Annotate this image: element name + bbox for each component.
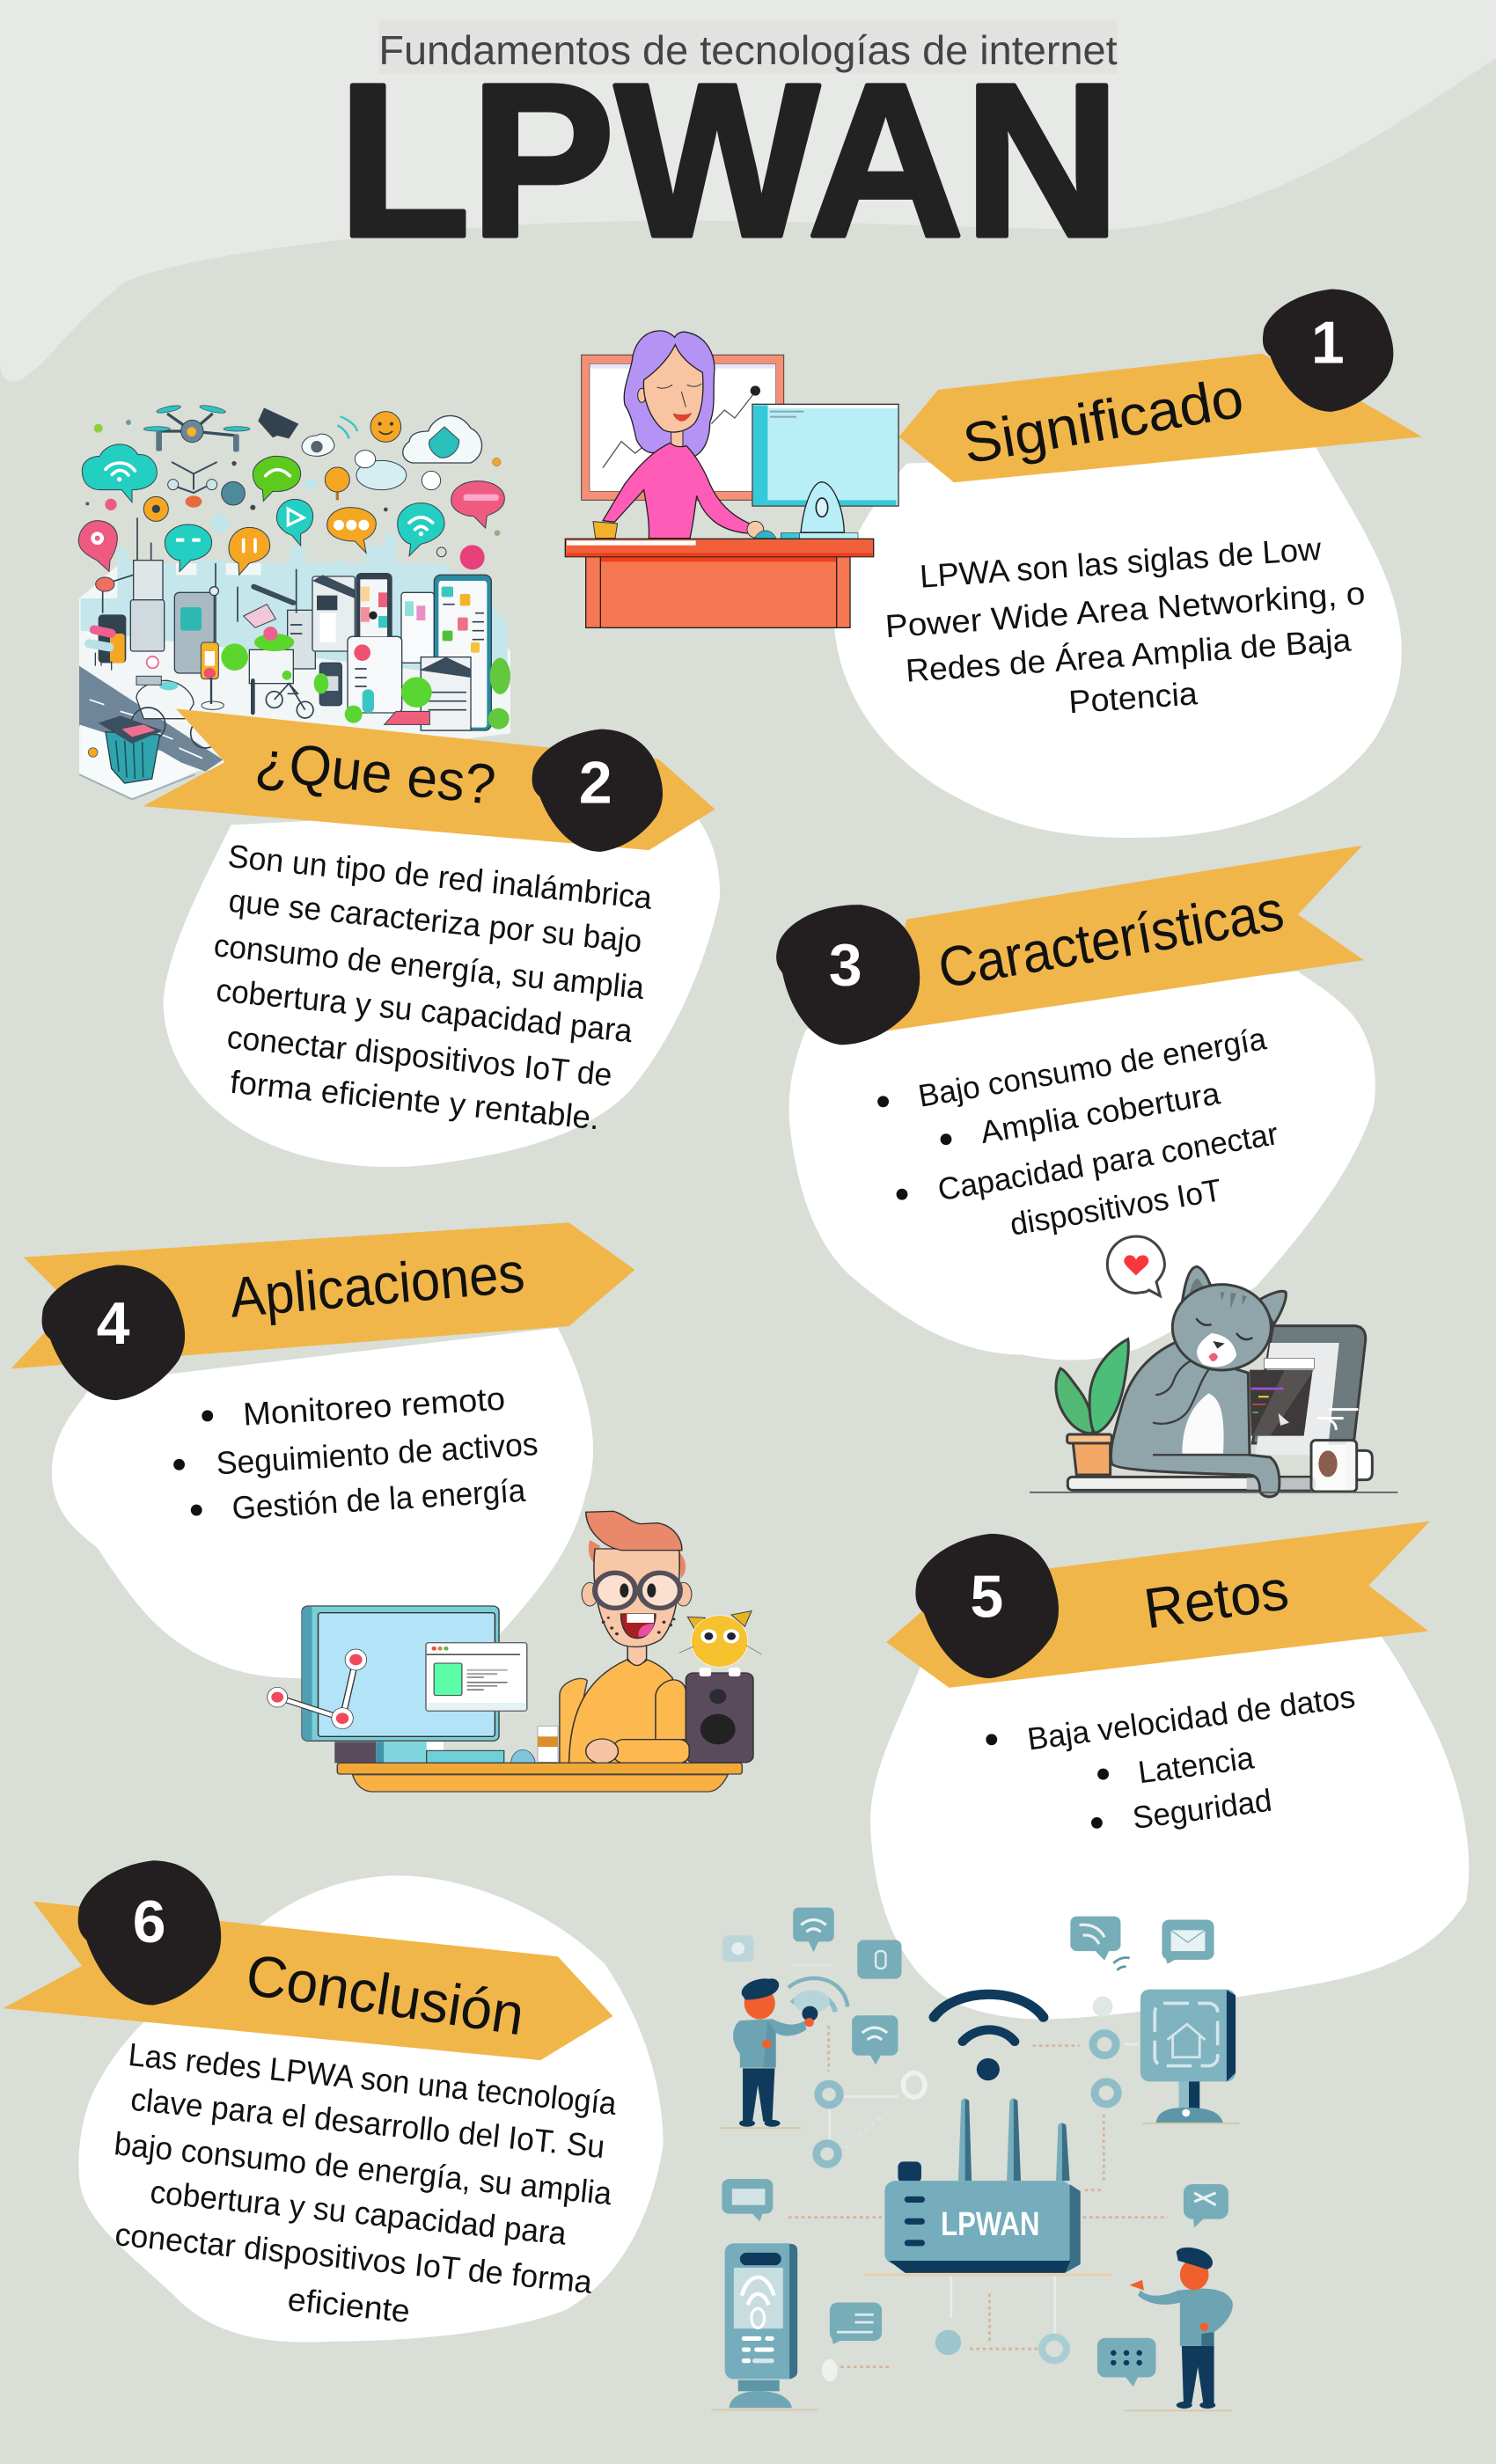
description text (113, 2036, 619, 2329)
number badge 1 (1263, 290, 1393, 412)
desk (353, 1775, 728, 1792)
heading: Significado: Significado (958, 365, 1248, 476)
text bubble 3 (789, 972, 1375, 1360)
heart bubble (1107, 1236, 1164, 1296)
description text: Redes de Área Amplia de Baja (905, 621, 1353, 689)
panel: que es (143, 708, 720, 1167)
number badge 2: 2 (579, 750, 612, 816)
cup (538, 1727, 558, 1762)
person right (1125, 2248, 1233, 2411)
heading: Aplicaciones: Aplicaciones (227, 1241, 527, 1330)
text bubble 6 (78, 1875, 664, 2343)
description text: clave para el desarrollo del IoT. Su (129, 2081, 606, 2165)
wifi signal (934, 1994, 1044, 2042)
illustration: woman at desk (565, 331, 898, 627)
network nodes (277, 1660, 356, 1719)
bullet list: Amplia cobertura (978, 1075, 1222, 1150)
number badge 6: 6 (133, 1889, 166, 1955)
bullet list: Seguimiento de activos (216, 1426, 539, 1481)
description text: Son un tipo de red inalámbrica (226, 838, 654, 916)
ribbon 6 (4, 1902, 612, 2060)
kiosk device (711, 2243, 818, 2410)
illustration: LPWAN router network (711, 1908, 1239, 2411)
person left (720, 1965, 847, 2129)
number badge 5: 5 (971, 1565, 1003, 1631)
small cat (687, 1617, 705, 1632)
text bubble 4 (52, 1328, 593, 1678)
text bubble 1 (834, 446, 1402, 838)
laptop base (1067, 1477, 1314, 1490)
illustration: cat with laptop (1030, 1236, 1397, 1497)
bullet list: Monitoreo remoto (242, 1381, 506, 1433)
text bubble 2 (164, 802, 720, 1167)
person (560, 1678, 587, 1763)
bullet list (173, 1381, 539, 1526)
bullet list: Latencia (1136, 1740, 1256, 1790)
number badge 3: 3 (829, 933, 862, 999)
illustration: man at computer with cat (268, 1511, 761, 1792)
number badge 6 (78, 1860, 221, 2006)
orange device (201, 642, 218, 679)
cat (1111, 1342, 1280, 1497)
bullet list (986, 1679, 1357, 1836)
description text (884, 531, 1367, 720)
ring nodes (817, 2033, 1118, 2164)
panel: caracteristicas (765, 846, 1375, 1360)
ribbon 4 (11, 1222, 634, 1368)
browser window (426, 1643, 527, 1711)
bike (266, 684, 313, 718)
description text: Power Wide Area Networking, o (884, 575, 1367, 644)
description text: forma eficiente y rentable. (229, 1064, 601, 1136)
description text: conectar dispositivos IoT de (225, 1019, 613, 1093)
ribbon 1 (898, 354, 1422, 482)
description text: LPWA son las siglas de Low (919, 531, 1323, 595)
monitor (302, 1606, 499, 1741)
description text: eficiente (286, 2281, 412, 2329)
number badge 1: 1 (1311, 310, 1345, 376)
ribbon 2 (143, 708, 715, 850)
drone (158, 414, 236, 436)
subtitle: Fundamentos de tecnologías de internet (378, 27, 1118, 73)
heading: Conclusion: Conclusión (242, 1942, 528, 2048)
ribbon 5 (886, 1522, 1430, 1688)
speaker (686, 1673, 753, 1763)
chat bubbles and icons (722, 1908, 1228, 2387)
panel: aplicaciones (11, 1222, 634, 1678)
heading: que es: ¿Que es? (253, 729, 498, 817)
bullet list: Seguridad (1131, 1783, 1274, 1836)
description text: consumo de energía, su amplia (212, 927, 646, 1006)
skyline (81, 534, 508, 680)
plant (1056, 1368, 1093, 1434)
panel: retos (870, 1522, 1469, 2020)
vehicle (136, 680, 194, 719)
posts (137, 517, 297, 651)
bubbles (78, 444, 504, 575)
number badge 3 (765, 895, 930, 1054)
hand and arm (613, 1740, 689, 1763)
panel: significado (834, 290, 1422, 838)
description text: que se caracteriza por su bajo (227, 883, 643, 959)
number badge 4: 4 (97, 1291, 130, 1357)
ribbon 3 (876, 846, 1364, 1032)
buildings (130, 561, 491, 730)
description text: cobertura y su capacidad para (215, 972, 634, 1049)
router (864, 2099, 1111, 2276)
description text: Potencia (1067, 675, 1199, 720)
coffee mug (1357, 1450, 1372, 1480)
description text: bajo consumo de energía, su amplia (113, 2125, 614, 2211)
kiosk left (99, 614, 126, 663)
panel: conclusion (4, 1860, 664, 2343)
bullet list: Bajo consumo de energía (916, 1021, 1269, 1114)
router: LPWAN (941, 2206, 1039, 2243)
trees and bushes (221, 643, 248, 671)
number badge 4 (42, 1265, 185, 1400)
text bubble 5 (870, 1634, 1469, 2020)
description text (212, 838, 654, 1136)
description text: conectar dispositivos IoT de forma (114, 2216, 594, 2300)
ground (79, 563, 510, 799)
dotted connection lines (788, 2026, 1168, 2367)
laptop (1252, 1326, 1366, 1443)
illustration: smart city with IoT bubbles (78, 404, 510, 799)
number badge 2 (532, 730, 663, 852)
heading: Retos: Retos (1140, 1558, 1292, 1640)
heading: Caracteristicas: Características (934, 878, 1288, 1001)
bullet list: Baja velocidad de datos (1025, 1679, 1357, 1757)
background light blob (0, 0, 1496, 382)
description text: Las redes LPWA son una tecnología (127, 2036, 619, 2122)
desk items under monitor (334, 1742, 376, 1763)
title: LPWAN (338, 38, 1120, 282)
number badge 5 (915, 1534, 1059, 1678)
bullet list: Gestión de la energía (231, 1472, 527, 1526)
road (79, 666, 223, 772)
icons (258, 407, 298, 438)
bullet list: dispositivos IoT (1008, 1172, 1224, 1243)
home display (1140, 1990, 1239, 2124)
bullet list (877, 1021, 1280, 1243)
trash bin (79, 724, 196, 799)
bullet list: Capacidad para conectar (935, 1116, 1280, 1207)
description text: cobertura y su capacidad para (149, 2174, 568, 2252)
